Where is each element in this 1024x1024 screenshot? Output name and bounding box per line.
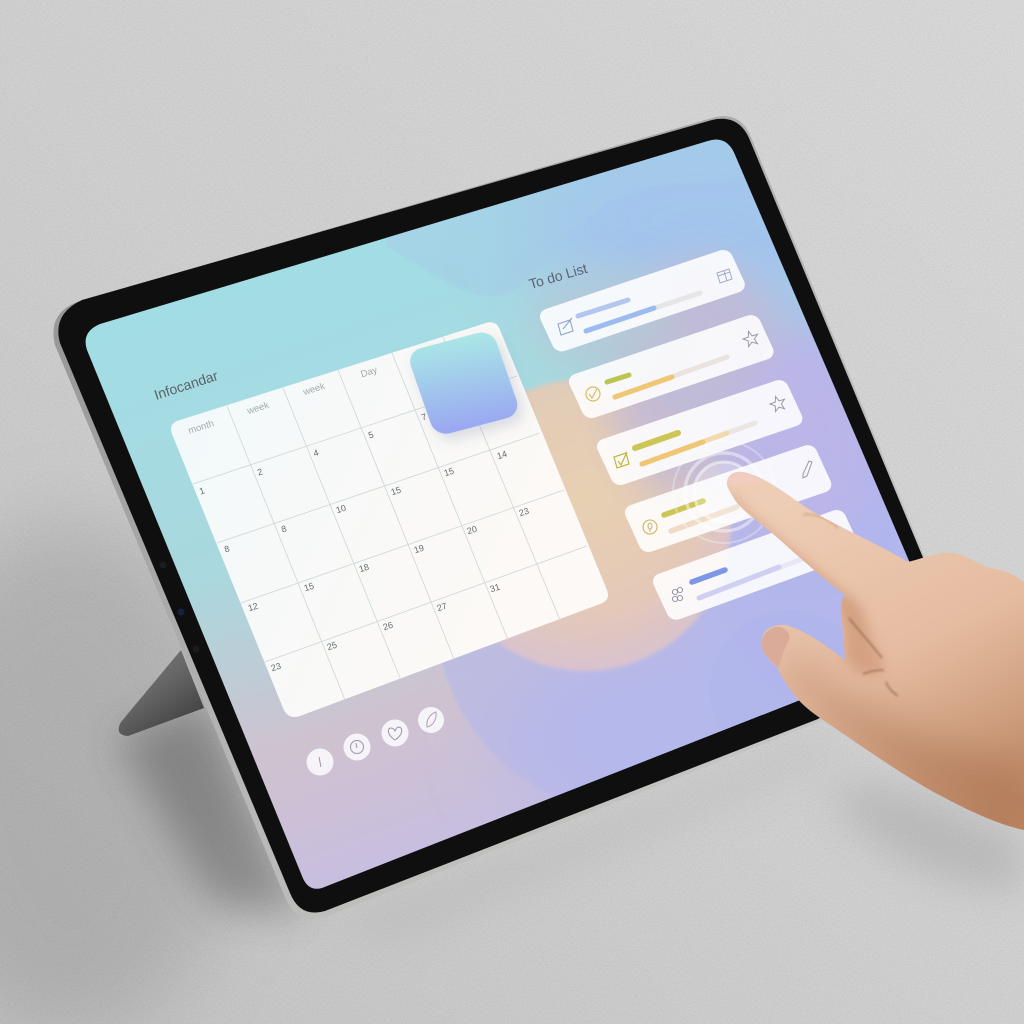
- finger creases: [849, 618, 898, 696]
- calendar panel: 18: [358, 562, 370, 574]
- calendar panel: 5: [367, 429, 375, 441]
- calendar panel: 26: [382, 620, 394, 632]
- icon: circled figure: [643, 520, 657, 534]
- to-do card 2: [566, 313, 777, 421]
- calendar panel: 14: [496, 449, 508, 461]
- to-do card 5: [650, 507, 863, 622]
- kickstand: [119, 650, 204, 736]
- calendar panel: 23: [270, 661, 282, 673]
- button: line: [306, 748, 334, 776]
- calendar panel: 27: [436, 601, 448, 613]
- title: Infocandar: Infocandar: [152, 367, 220, 403]
- icon: circled check: [586, 387, 600, 401]
- button: leaf: [418, 707, 444, 733]
- cast shadows on surface: [118, 700, 1024, 940]
- calendar panel: 8: [223, 543, 231, 555]
- to-do card 4: [622, 443, 834, 554]
- calendar panel: 19: [413, 543, 425, 555]
- calendar panel: 2: [256, 466, 264, 478]
- tablet body: [53, 116, 930, 919]
- calendar panel: week: [245, 400, 271, 417]
- to-do card 1: [537, 248, 748, 354]
- icon: star: [741, 329, 760, 348]
- calendar panel: 20: [466, 524, 478, 536]
- index fingernail: [728, 472, 760, 485]
- calendar panel: 7: [420, 411, 428, 423]
- thumb nail: [762, 627, 790, 667]
- calendar panel: 8: [280, 523, 288, 535]
- calendar panel: Day: [359, 365, 379, 380]
- button: heart: [382, 720, 408, 746]
- icon: star: [768, 394, 787, 413]
- calendar panel: 25: [326, 640, 338, 652]
- calendar panel: 23: [518, 506, 530, 518]
- calendar panel: 31: [489, 582, 501, 594]
- calendar panel: 12: [247, 601, 259, 613]
- icon: grid: [717, 269, 732, 283]
- heading: To do List: To do List: [527, 260, 589, 292]
- gradient tile: [406, 329, 521, 437]
- calendar panel: 4: [312, 447, 320, 459]
- icon: square check: [614, 452, 629, 468]
- calendar panel: [171, 322, 608, 717]
- bottom icon buttons: [306, 707, 444, 776]
- to-do card 3: [594, 378, 805, 487]
- calendar panel: 1: [198, 485, 206, 497]
- calendar panel: 15: [443, 466, 455, 478]
- hand pointing at screen: [727, 472, 1024, 830]
- calendar panel: 10: [335, 503, 347, 515]
- icon: pencil: [803, 461, 812, 478]
- calendar panel: 15: [390, 485, 402, 497]
- icon: small glyphs: [672, 587, 683, 602]
- icon: edit checkbox: [558, 318, 573, 335]
- calendar panel: week: [301, 381, 327, 398]
- calendar panel: month: [187, 418, 215, 437]
- touch ripple: [673, 441, 775, 543]
- tablet screen: [86, 140, 910, 889]
- sensors on bezel: [160, 562, 200, 652]
- button: clock: [344, 734, 370, 760]
- calendar panel: 15: [303, 581, 315, 593]
- knuckle crease: [803, 514, 838, 528]
